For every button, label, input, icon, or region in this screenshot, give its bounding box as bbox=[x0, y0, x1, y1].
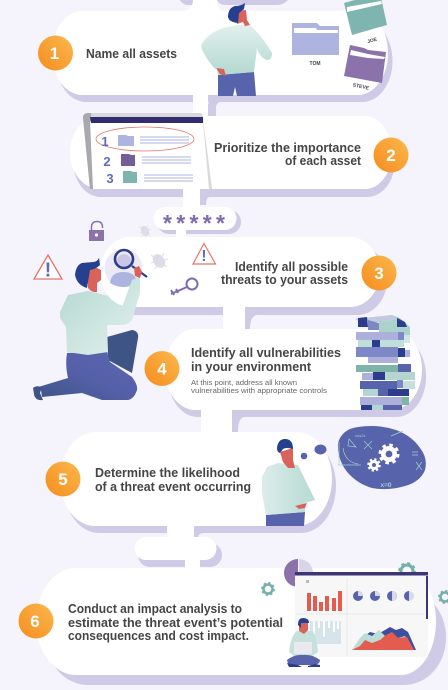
step 4 heading: Identify all vulnerabilities bbox=[191, 345, 341, 360]
step 3 heading: Identify all possible bbox=[235, 259, 348, 274]
figure: kneeling man with magnifier bbox=[33, 249, 147, 400]
dashboard bbox=[295, 572, 428, 657]
icon: warning triangle left bbox=[34, 255, 62, 279]
step 4 heading: in your environment bbox=[191, 359, 312, 374]
thought bubble with gears: cos2x bbox=[355, 433, 365, 438]
folder: Joe: JOE bbox=[367, 37, 379, 45]
thought dots bbox=[301, 444, 326, 459]
icons: gears bbox=[262, 563, 448, 603]
folder: Joe bbox=[344, 0, 387, 45]
icon: padlock bbox=[89, 222, 104, 241]
figure: man thinking bbox=[201, 3, 272, 96]
step 6 badge: 6 bbox=[30, 612, 40, 631]
step 3 heading bbox=[221, 259, 348, 287]
illustration: prioritized list tablet bbox=[83, 113, 212, 189]
step 5 heading bbox=[95, 465, 251, 494]
step 5 badge bbox=[46, 462, 80, 496]
figure: man thinking with hand on chin bbox=[262, 439, 315, 526]
step 3 heading: threats to your assets bbox=[221, 272, 348, 287]
step 4 body text: At this point, address all known bbox=[191, 378, 297, 387]
password stars: ***** bbox=[163, 210, 225, 236]
figure: person with laptop bbox=[287, 618, 320, 667]
step 3 badge bbox=[362, 256, 396, 290]
step 4 badge bbox=[144, 351, 180, 386]
step 1 badge: 1 bbox=[50, 44, 59, 63]
bar chart bbox=[307, 591, 342, 611]
stacked area chart bbox=[352, 627, 416, 650]
step 4 body text: vulnerabilities with appropriate controls bbox=[191, 386, 327, 395]
light column chart bbox=[310, 621, 341, 644]
step 6 heading: Conduct an impact analysis to bbox=[68, 601, 242, 616]
step 5 heading: of a threat event occurring bbox=[95, 479, 251, 494]
pie charts bbox=[353, 591, 414, 601]
step 6 badge bbox=[18, 604, 54, 638]
thought bubble with gears: x=0 bbox=[380, 482, 392, 489]
step 2 badge: 2 bbox=[386, 146, 396, 165]
step 2 heading bbox=[214, 140, 362, 168]
step 1 badge bbox=[38, 36, 73, 70]
step 1 heading: Name all assets bbox=[86, 46, 177, 61]
icon: key bbox=[171, 278, 198, 295]
icon: bug bbox=[151, 252, 168, 270]
warning mark left: ! bbox=[45, 260, 51, 282]
step 5 badge: 5 bbox=[58, 470, 68, 489]
step 2 heading: Prioritize the importance bbox=[214, 140, 361, 155]
icon: pie behind dashboard bbox=[284, 559, 313, 587]
step 6 heading: estimate the threat event’s potential bbox=[68, 615, 283, 630]
illustration: prioritized list tablet: 2 bbox=[103, 154, 111, 169]
thought bubble with gears bbox=[338, 426, 426, 489]
step 4 badge: 4 bbox=[157, 360, 167, 378]
step 5 heading: Determine the likelihood bbox=[95, 465, 240, 480]
folder: Steve bbox=[344, 45, 386, 92]
step 2 heading: of each asset bbox=[285, 153, 362, 168]
step 3 badge: 3 bbox=[374, 264, 384, 283]
step 4 heading bbox=[191, 345, 341, 374]
illustration: jenga tower bbox=[355, 315, 415, 410]
icon: bug faint bbox=[139, 225, 151, 237]
icon: warning triangle right bbox=[193, 244, 216, 264]
illustration: prioritized list tablet: 1 bbox=[101, 134, 109, 149]
step 4 body text bbox=[191, 378, 327, 395]
folder: Tom bbox=[292, 23, 339, 67]
illustration: prioritized list tablet: 3 bbox=[106, 171, 114, 186]
folder: Steve: STEVE bbox=[352, 82, 370, 92]
folder: Tom: TOM bbox=[309, 61, 321, 67]
step 6 heading: consequences and cost impact. bbox=[68, 628, 249, 643]
warning mark right: ! bbox=[201, 248, 207, 265]
step 6 heading bbox=[68, 601, 283, 643]
step 2 badge bbox=[374, 138, 408, 172]
